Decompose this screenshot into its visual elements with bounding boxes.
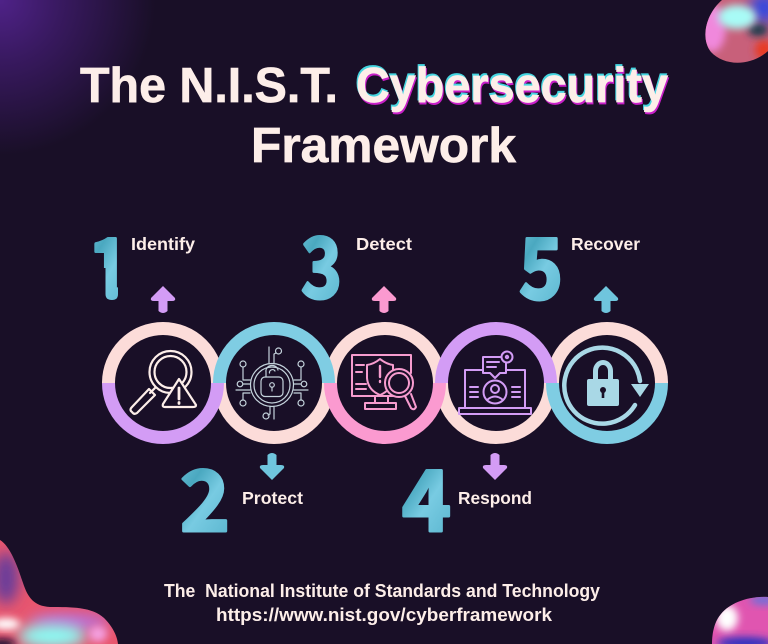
blob: bottom right [712, 596, 768, 644]
step 3: Detect [301, 202, 412, 323]
step 5: Recover [519, 203, 640, 324]
number 2: 2 [180, 435, 230, 556]
title: Cybersecurity: Cybersecurity [356, 59, 668, 113]
footer line 2: https://www.nist.gov/cyberframework [216, 604, 553, 625]
number 1: 1 [88, 203, 130, 324]
footer source text [164, 580, 601, 625]
label Protect: Protect [242, 488, 303, 508]
label Identify: Identify [131, 234, 195, 254]
step 4: Respond [402, 435, 532, 556]
label Respond: Respond [458, 488, 532, 508]
arrow down blue [260, 453, 284, 480]
number 5: 5 [519, 203, 563, 324]
icon: monitor shield magnifier [352, 355, 416, 409]
icon: padlock with rotating arrow [564, 348, 649, 424]
icon: circuit padlock [236, 347, 308, 419]
step 1: Identify [94, 237, 195, 313]
blob: bottom left [0, 535, 120, 644]
number 3: 3 [301, 202, 342, 323]
arrow up purple [151, 286, 175, 313]
blob: top right [705, 0, 768, 63]
label Detect: Detect [356, 234, 412, 254]
title: Framework: Framework [251, 119, 517, 173]
label Recover: Recover [571, 234, 640, 254]
arrow down purple [483, 453, 507, 480]
ring halves: coloured [108, 328, 662, 438]
title [80, 59, 668, 173]
arrow up blue [594, 286, 618, 313]
title: The N.I.S.T.: The N.I.S.T. [80, 59, 338, 113]
icon: magnifier with warning [130, 351, 196, 414]
arrow up pink [372, 286, 396, 313]
ring chain [108, 328, 662, 438]
step 2: Protect [180, 435, 303, 556]
ring halves: pale [108, 328, 662, 438]
number 4: 4 [402, 435, 451, 556]
icon: laptop with chat and user [459, 352, 531, 414]
footer line 1: The National Institute of Standards and Technology [164, 580, 601, 601]
